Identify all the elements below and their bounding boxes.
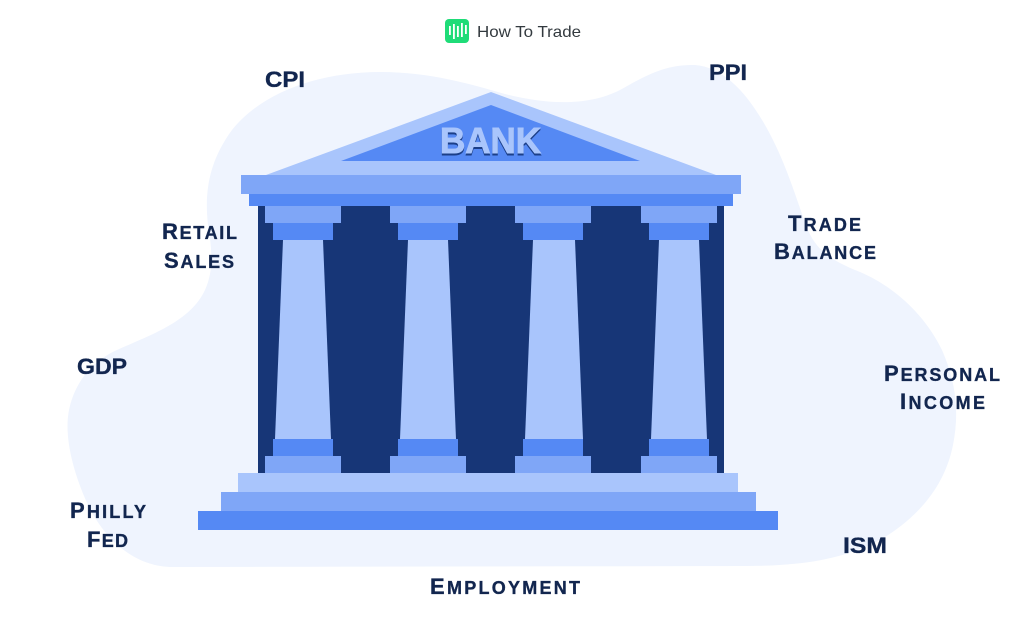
label: Philly Fed [70,498,146,552]
label: Trade Balance: BALANCE [774,239,876,264]
label: CPI: CPI [265,67,305,92]
label: PPI: PPI [709,60,747,85]
label: GDP: GDP [77,354,127,379]
pediment [266,92,716,175]
bank building [198,92,778,530]
cornice [241,175,741,206]
label: Personal Income: INCOME [900,389,985,414]
label: Personal Income: PERSONAL [884,361,1000,386]
label: Trade Balance: TRADE [788,211,861,236]
dark interior wall [258,206,724,473]
label: Trade Balance [774,211,876,264]
label: Employment: EMPLOYMENT [430,574,580,599]
logo wordmark: How To Trade [477,24,581,41]
logo [445,19,581,43]
label: ISM: ISM [843,533,887,558]
bank label: BANK [440,122,541,163]
label: Personal Income [884,361,1000,414]
column 4 [641,206,717,473]
label: Retail Sales: RETAIL [162,219,237,244]
column 2 [390,206,466,473]
label: Retail Sales [162,219,237,273]
column 1 [265,206,341,473]
label: Philly Fed: FED [87,527,128,552]
bank label: BANK [440,120,541,161]
column 3 [515,206,591,473]
background blob [68,65,956,567]
icon: logo mark [445,19,469,43]
label: Philly Fed: PHILLY [70,498,146,523]
steps [198,473,778,530]
label: Retail Sales: SALES [164,248,234,273]
